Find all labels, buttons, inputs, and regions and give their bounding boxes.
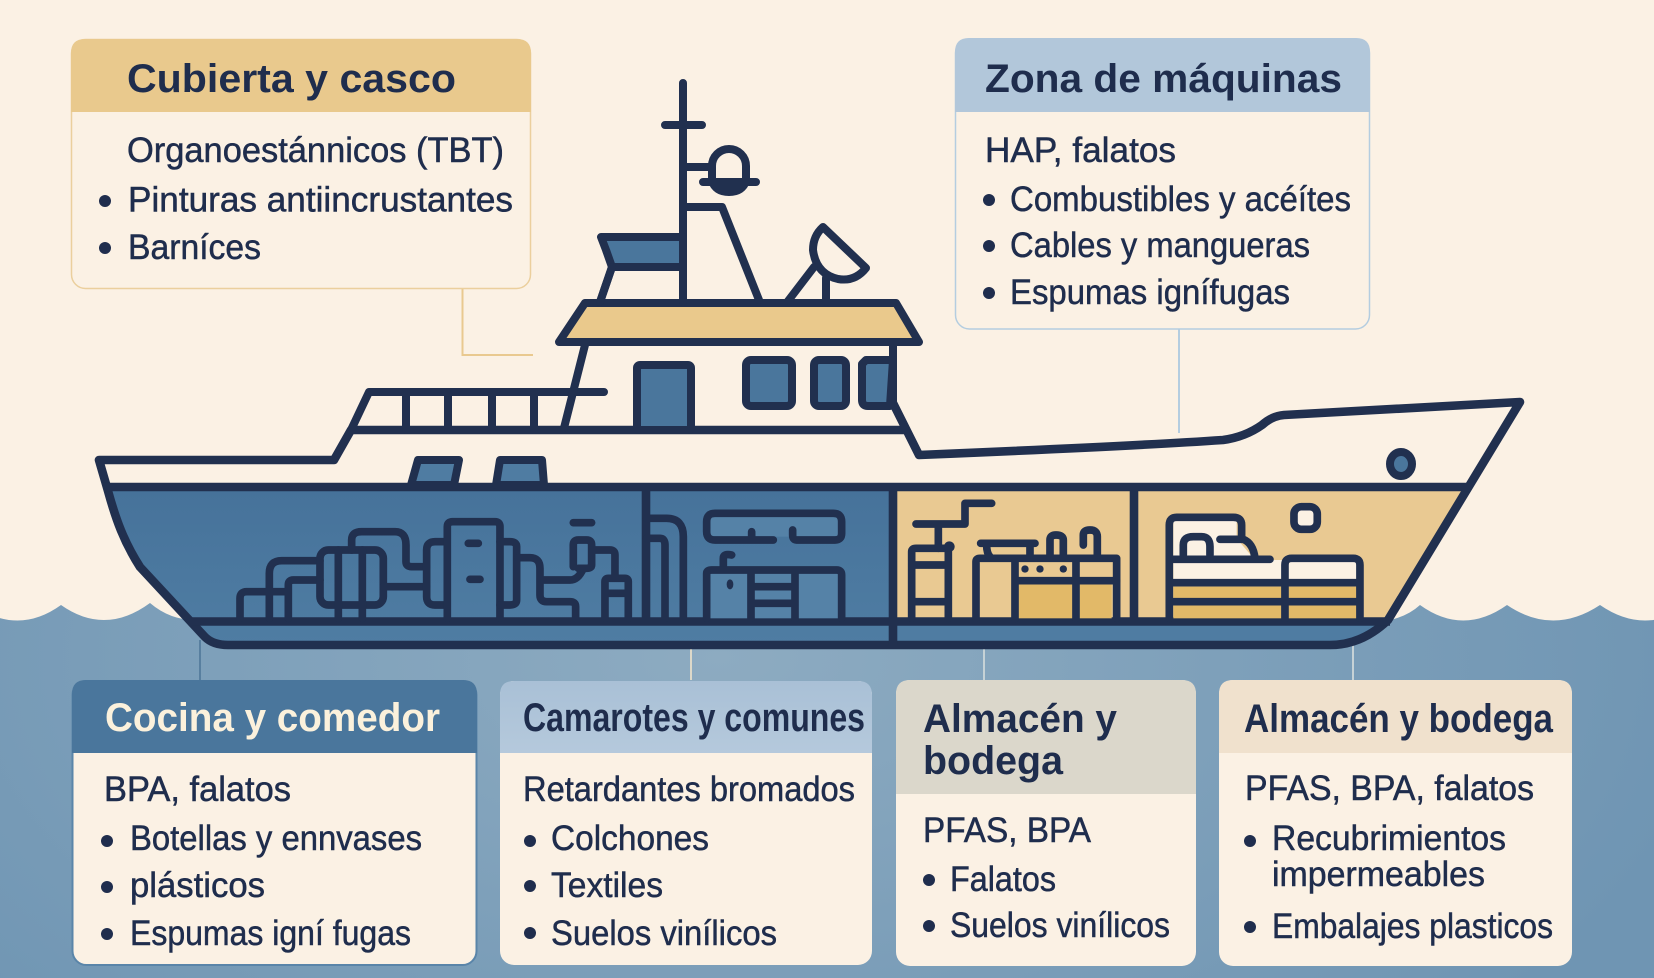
mast lamp (703, 149, 756, 196)
substances: BPA, falatos (104, 770, 291, 809)
compartment lines (104, 487, 1470, 645)
window 3 (862, 360, 893, 406)
header band (71, 39, 531, 112)
list: Colchones (551, 819, 709, 858)
list (524, 819, 777, 953)
list: Falatos (950, 860, 1056, 899)
heading: Almacén y (923, 697, 1118, 741)
bridge box (600, 237, 683, 302)
list: Suelos vinílicos (551, 914, 777, 953)
window 1 (746, 360, 792, 406)
list: Suelos vinílicos (950, 906, 1170, 945)
hull below-deck blue compartments (105, 487, 893, 645)
panel: Almacén y bodega (PFAS, BPA, falatos) (1219, 680, 1572, 966)
hull and deck outline (99, 402, 1520, 645)
list: Barníces (128, 228, 261, 267)
heading: Cubierta y casco (127, 57, 456, 101)
header band (896, 680, 1196, 794)
heading: Camarotes y comunes (523, 696, 865, 740)
list: Combustibles y acéítes (1010, 180, 1351, 219)
hull tan compartments (893, 487, 1470, 621)
radar dish (788, 227, 866, 302)
bed and cabin furniture (1169, 507, 1360, 618)
hatch 1 (411, 460, 459, 485)
hatch 2 (496, 460, 544, 485)
panel: Cubierta y casco (71, 39, 531, 288)
header band (1219, 680, 1572, 753)
header band (72, 680, 477, 753)
heading: Zona de máquinas (985, 57, 1342, 101)
hull keel strip right (893, 621, 1388, 645)
list: Embalajes plasticos (1272, 907, 1553, 946)
door (637, 365, 691, 430)
substances: Organoestánnicos (TBT) (127, 131, 504, 170)
substances: PFAS, BPA (923, 811, 1092, 850)
list: Cables y mangueras (1010, 226, 1310, 265)
panel: Camarotes y comunes (500, 681, 872, 965)
connector lines (200, 288, 1353, 680)
panel: Zona de máquinas (955, 38, 1370, 329)
heading (923, 697, 1118, 783)
kitchen equipment (912, 503, 1117, 618)
bridge legs (600, 267, 612, 302)
heading: Almacén y bodega (1244, 697, 1554, 741)
roof (559, 303, 919, 342)
substances: Retardantes bromados (523, 770, 855, 809)
list: Espumas igní fugas (130, 914, 411, 953)
list: impermeables (1272, 855, 1485, 894)
list: plásticos (130, 866, 265, 905)
deck railing (351, 392, 604, 430)
panel: Almacén y bodega (PFAS, BPA) (896, 680, 1196, 966)
panel: Cocina y comedor (72, 680, 477, 965)
list: Espumas ignífugas (1010, 273, 1290, 312)
list: Pinturas antiincrustantes (128, 180, 513, 220)
engine room machinery (240, 522, 628, 618)
list (983, 180, 1351, 312)
ship illustration (99, 83, 1520, 645)
list (923, 860, 1170, 945)
header band (500, 681, 872, 753)
list: Recubrimientos (1272, 819, 1506, 858)
window 2 (814, 360, 846, 406)
mast (665, 83, 759, 302)
header band (955, 38, 1370, 112)
galley machinery and cabinet (647, 513, 842, 618)
list: Botellas y ennvases (130, 819, 422, 858)
substances: HAP, falatos (985, 131, 1176, 170)
superstructure walls (564, 345, 893, 428)
list (99, 180, 513, 267)
list (1244, 819, 1553, 946)
substances: PFAS, BPA, falatos (1245, 769, 1534, 808)
heading: Cocina y comedor (105, 696, 440, 740)
sea with scalloped waves (0, 603, 1654, 978)
list (101, 819, 422, 953)
heading: bodega (923, 739, 1064, 783)
porthole (1390, 452, 1412, 476)
list: Textiles (551, 866, 663, 905)
